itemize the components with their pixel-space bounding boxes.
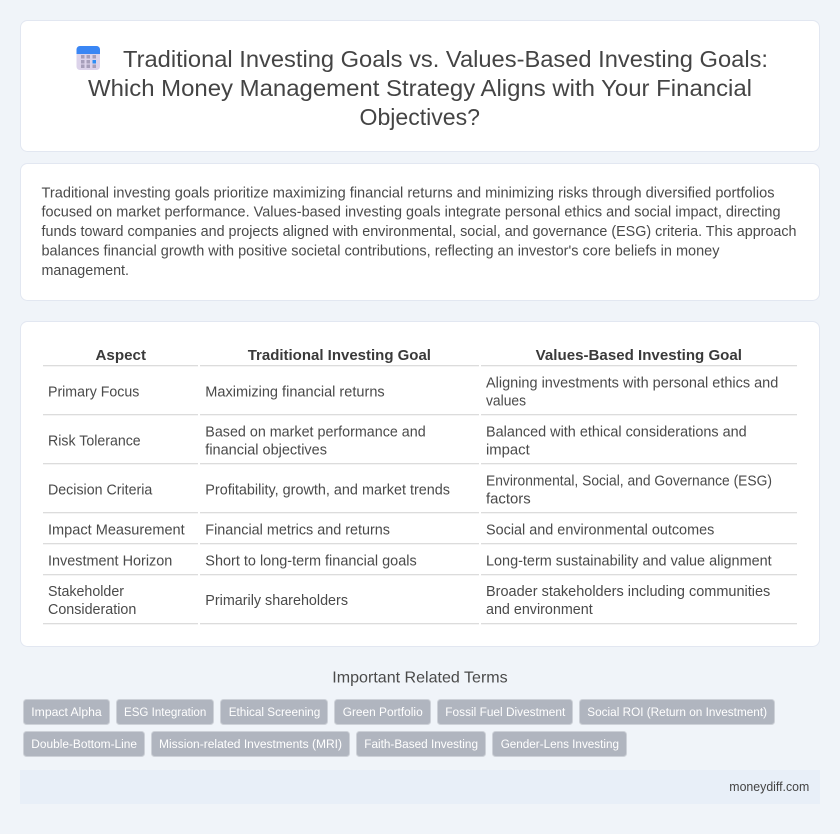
- table row: decision criteria: Decision Criteria: [48, 482, 152, 498]
- table row: stakeholder consideration: and environment: [486, 602, 593, 618]
- heading: title text: [88, 46, 768, 130]
- table row: decision criteria: [43, 473, 797, 513]
- text block: introduction paragraph: Traditional investing goals prioritize maximizing financial returns and minimizing risks through diversified portfolios: [42, 185, 774, 201]
- table header row: Values-Based Investing Goal: [536, 347, 742, 364]
- heading: title text: Traditional Investing Goals vs. Values-Based Investing Goals:: [123, 46, 768, 72]
- tag: Impact Alpha: Impact Alpha: [31, 705, 102, 719]
- table header row: [43, 347, 797, 366]
- table row: impact measurement: Social and environmental outcomes: [486, 522, 714, 538]
- table row: impact measurement: Impact Measurement: [48, 522, 185, 538]
- table row: investment horizon: Long-term sustainability and value alignment: [486, 553, 772, 569]
- tag: ESG Integration: ESG Integration: [124, 705, 206, 719]
- tag: Social ROI: Social ROI (Return on Investment): [587, 705, 767, 719]
- tag: Mission-related Investments: [152, 732, 350, 756]
- table row: stakeholder consideration: [43, 584, 797, 624]
- tag: Mission-related Investments: Mission-related Investments (MRI): [159, 737, 342, 751]
- text block: introduction paragraph: balances financial growth with positive societal contributions, reflecting an investor's core beliefs in money: [42, 243, 720, 259]
- tag: Double-Bottom-Line: [24, 732, 144, 756]
- heading: title text: Which Money Management Strategy Aligns with Your Financial: [88, 75, 752, 101]
- tag: Green Portfolio: Green Portfolio: [343, 705, 423, 719]
- table header row: Aspect: [96, 347, 146, 364]
- table row: risk tolerance: financial objectives: [205, 442, 327, 458]
- table row: decision criteria: Profitability, growth, and market trends: [205, 482, 450, 498]
- text block: introduction paragraph: funds toward companies and projects aligned with environmental, social, and governance (ESG) criteria. This approach: [42, 224, 797, 240]
- icon: calendar: [76, 46, 100, 70]
- text block: introduction paragraph: focused on market performance. Values-based investing goals integrate personal ethics and social impact, directing: [42, 205, 781, 221]
- tag list: related terms: [24, 700, 774, 756]
- table row: stakeholder consideration: Consideration: [48, 602, 136, 618]
- table row: investment horizon: [43, 553, 797, 575]
- tag: Gender-Lens Investing: Gender-Lens Investing: [501, 737, 619, 751]
- tag: Impact Alpha: [24, 700, 110, 724]
- table row: stakeholder consideration: Broader stakeholders including communities: [486, 584, 770, 600]
- table row: investment horizon: Short to long-term financial goals: [205, 553, 417, 569]
- table row: primary focus: Aligning investments with personal ethics and: [486, 375, 778, 391]
- footer bar: moneydiff.com: [729, 780, 809, 794]
- tag: Fossil Fuel Divestment: [438, 700, 572, 724]
- tag: Ethical Screening: Ethical Screening: [229, 705, 320, 719]
- tag: Gender-Lens Investing: [492, 732, 626, 756]
- heading: important related terms: Important Related Terms: [332, 669, 508, 686]
- table row: primary focus: values: [486, 393, 526, 409]
- table row: risk tolerance: [43, 424, 797, 464]
- table row: investment horizon: Investment Horizon: [48, 553, 172, 569]
- tag: Faith-Based Investing: Faith-Based Investing: [364, 737, 478, 751]
- table row: stakeholder consideration: Primarily shareholders: [205, 593, 348, 609]
- table row: decision criteria: factors: [486, 491, 531, 507]
- tag: Green Portfolio: [334, 700, 430, 724]
- table row: risk tolerance: Risk Tolerance: [48, 433, 141, 449]
- table row: risk tolerance: impact: [486, 442, 530, 458]
- table header row: Traditional Investing Goal: [248, 347, 431, 364]
- table row: primary focus: [43, 375, 797, 415]
- text block: introduction paragraph: management.: [42, 263, 129, 279]
- heading: title text: Objectives?: [360, 104, 480, 130]
- tag: ESG Integration: [116, 700, 214, 724]
- tag: Ethical Screening: [220, 700, 328, 724]
- footer bar: [20, 770, 820, 804]
- table row: primary focus: Primary Focus: [48, 384, 139, 400]
- table row: impact measurement: [43, 522, 797, 544]
- table row: stakeholder consideration: Stakeholder: [48, 584, 124, 600]
- table row: impact measurement: Financial metrics and returns: [205, 522, 390, 538]
- panel: comparison table: [20, 322, 820, 646]
- table row: primary focus: Maximizing financial returns: [205, 384, 385, 400]
- tag: Faith-Based Investing: [356, 732, 486, 756]
- panel: introduction: [20, 164, 820, 300]
- text block: introduction paragraph: [42, 185, 797, 279]
- table row: decision criteria: Environmental, Social, and Governance (ESG): [486, 473, 772, 489]
- tag: Fossil Fuel Divestment: Fossil Fuel Divestment: [445, 705, 566, 719]
- tag: Double-Bottom-Line: Double-Bottom-Line: [31, 737, 137, 751]
- panel: title: [20, 20, 820, 152]
- table row: risk tolerance: Balanced with ethical considerations and: [486, 424, 747, 440]
- tag: Social ROI: [580, 700, 774, 724]
- table row: risk tolerance: Based on market performance and: [205, 424, 426, 440]
